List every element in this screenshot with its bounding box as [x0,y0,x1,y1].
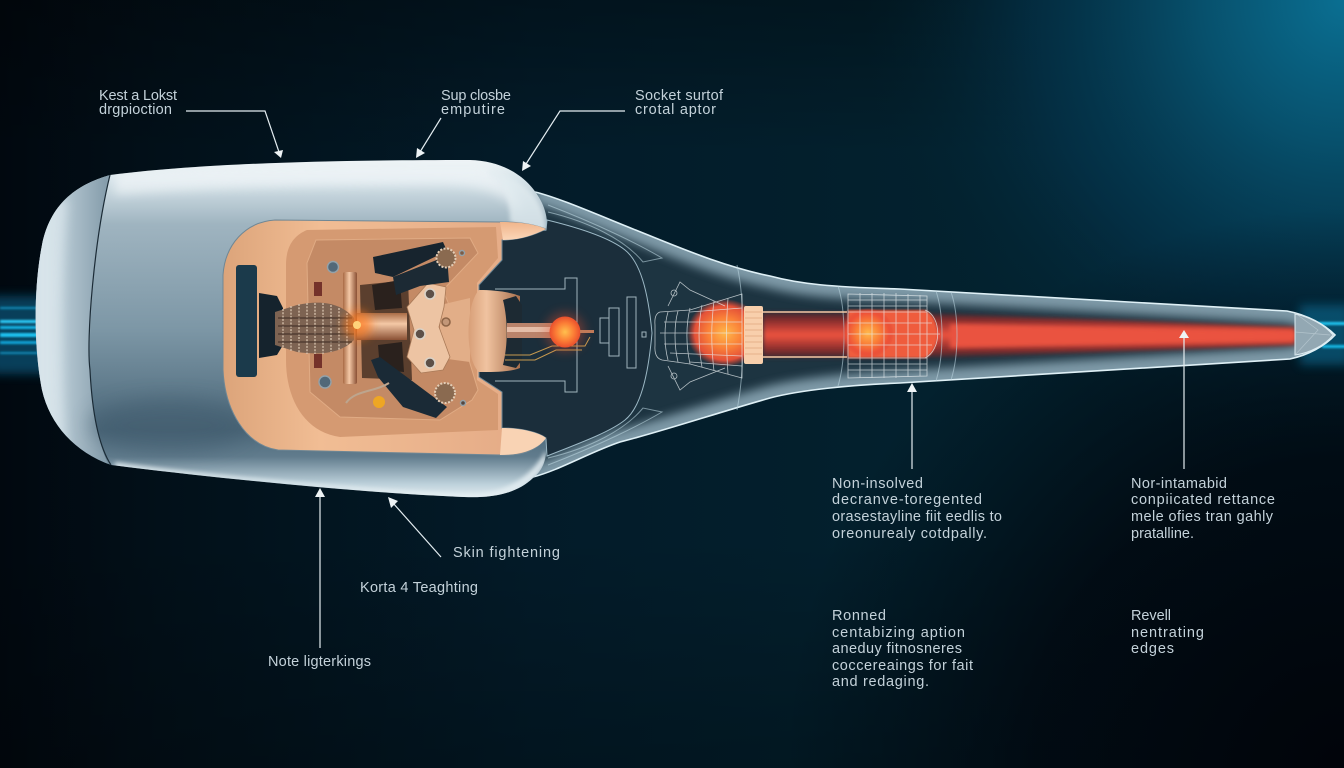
callout: top right: Socket surtof [635,88,724,104]
text block: non-insolved: orasestayline fiit eedlis to [832,509,1002,525]
callout: top left: Kest a Lokst [99,88,177,104]
T brackets and rectangles [495,278,646,392]
tip cap [1295,314,1333,355]
red energy beam [763,312,1295,358]
neck edge sheen [533,192,1335,477]
callout: skin tightening: Skin fightening [453,545,560,561]
arrow: beam [1179,330,1189,469]
peach connector block [744,306,847,364]
rear slot [236,265,257,377]
bottom tab [500,428,546,455]
upper coil [436,248,456,268]
peach bridge to collar [440,298,470,362]
mesh cage with glow, left [655,282,763,390]
mesh cage with glow, right [842,293,940,378]
vertical copper cylinder [343,272,357,384]
text block: non-intamabid: mele ofies tran gahly [1131,509,1274,525]
left end cap [36,175,110,464]
text block: ronned: Ronned [832,608,886,624]
mesh coil [275,303,354,354]
top highlight [114,162,510,204]
mid dark band [90,399,250,451]
callout: top right: crotal aptor [635,102,716,118]
text block: ronned: centabizing aption [832,625,965,641]
callout: top middle [416,88,511,158]
text block: non-insolved: oreonurealy cotdpally. [832,526,987,542]
lower black clamp [371,357,447,418]
wire [346,383,389,403]
right light streaks [1300,305,1344,365]
inner tray surface [307,238,478,420]
upper small clamp body [393,256,449,295]
dark wiring mass [360,280,412,380]
bottom highlight [115,450,546,500]
callout: top middle: Sup closbe [441,88,511,104]
text block: non-intamabid: conpiicated rettance [1131,492,1275,508]
tip detail [1295,313,1330,355]
silver head shell [20,160,547,500]
lower coil [435,383,455,403]
rear connector [259,293,283,358]
text block: non-insolved: Non-insolved [832,476,923,492]
text block: non-insolved: decranve-toregented [832,492,982,508]
copper mechanism [275,242,470,418]
bolts [415,289,450,368]
callout: top left: drgpioction [99,102,172,118]
text block: revell: edges [1131,641,1174,657]
text block: revell: nentrating [1131,625,1204,641]
inner dark orange tray [286,227,498,437]
window frame accents [548,205,662,465]
text block: ronned: and redaging. [832,674,929,690]
dark wiring patches [372,280,404,372]
callout: top middle: emputire [441,102,505,118]
top tab [500,222,546,240]
text block: revell [1131,608,1204,657]
arrow: mesh section [907,383,917,469]
text block: non-insolved [832,476,1002,542]
device: transparent neck and tip [533,192,1335,477]
callout: top left [99,88,283,158]
callout: top right [522,88,724,171]
horizontal copper cylinder [357,313,407,340]
callout: skin tightening [388,497,560,561]
orange cavity [223,220,546,455]
callout: note lightening [268,488,371,670]
text block: ronned: coccereaings for fait [832,658,973,674]
text block: non-intamabid: Nor-intamabid [1131,476,1227,492]
right shoulder highlight [508,182,546,228]
text block: ronned: aneduy fitnosneres [832,641,962,657]
text block: ronned [832,608,973,690]
neck construction lines [737,265,957,410]
text block: non-intamabid [1131,476,1275,542]
screws [319,250,466,406]
callout: note lightening: Note ligterkings [268,654,371,670]
yellow LED [373,396,385,408]
peach flange plate [407,283,450,373]
text block: revell: Revell [1131,608,1171,624]
spark glow [344,311,372,339]
label: korta: Korta 4 Teaghting [360,580,478,596]
red components [314,282,322,296]
left light streaks [0,296,50,374]
upper black clamp [373,242,447,277]
shaft and glowing ball [505,312,594,360]
dark inner window [470,220,652,456]
text block: non-intamabid: pratalline. [1131,526,1194,542]
collar [468,290,522,372]
